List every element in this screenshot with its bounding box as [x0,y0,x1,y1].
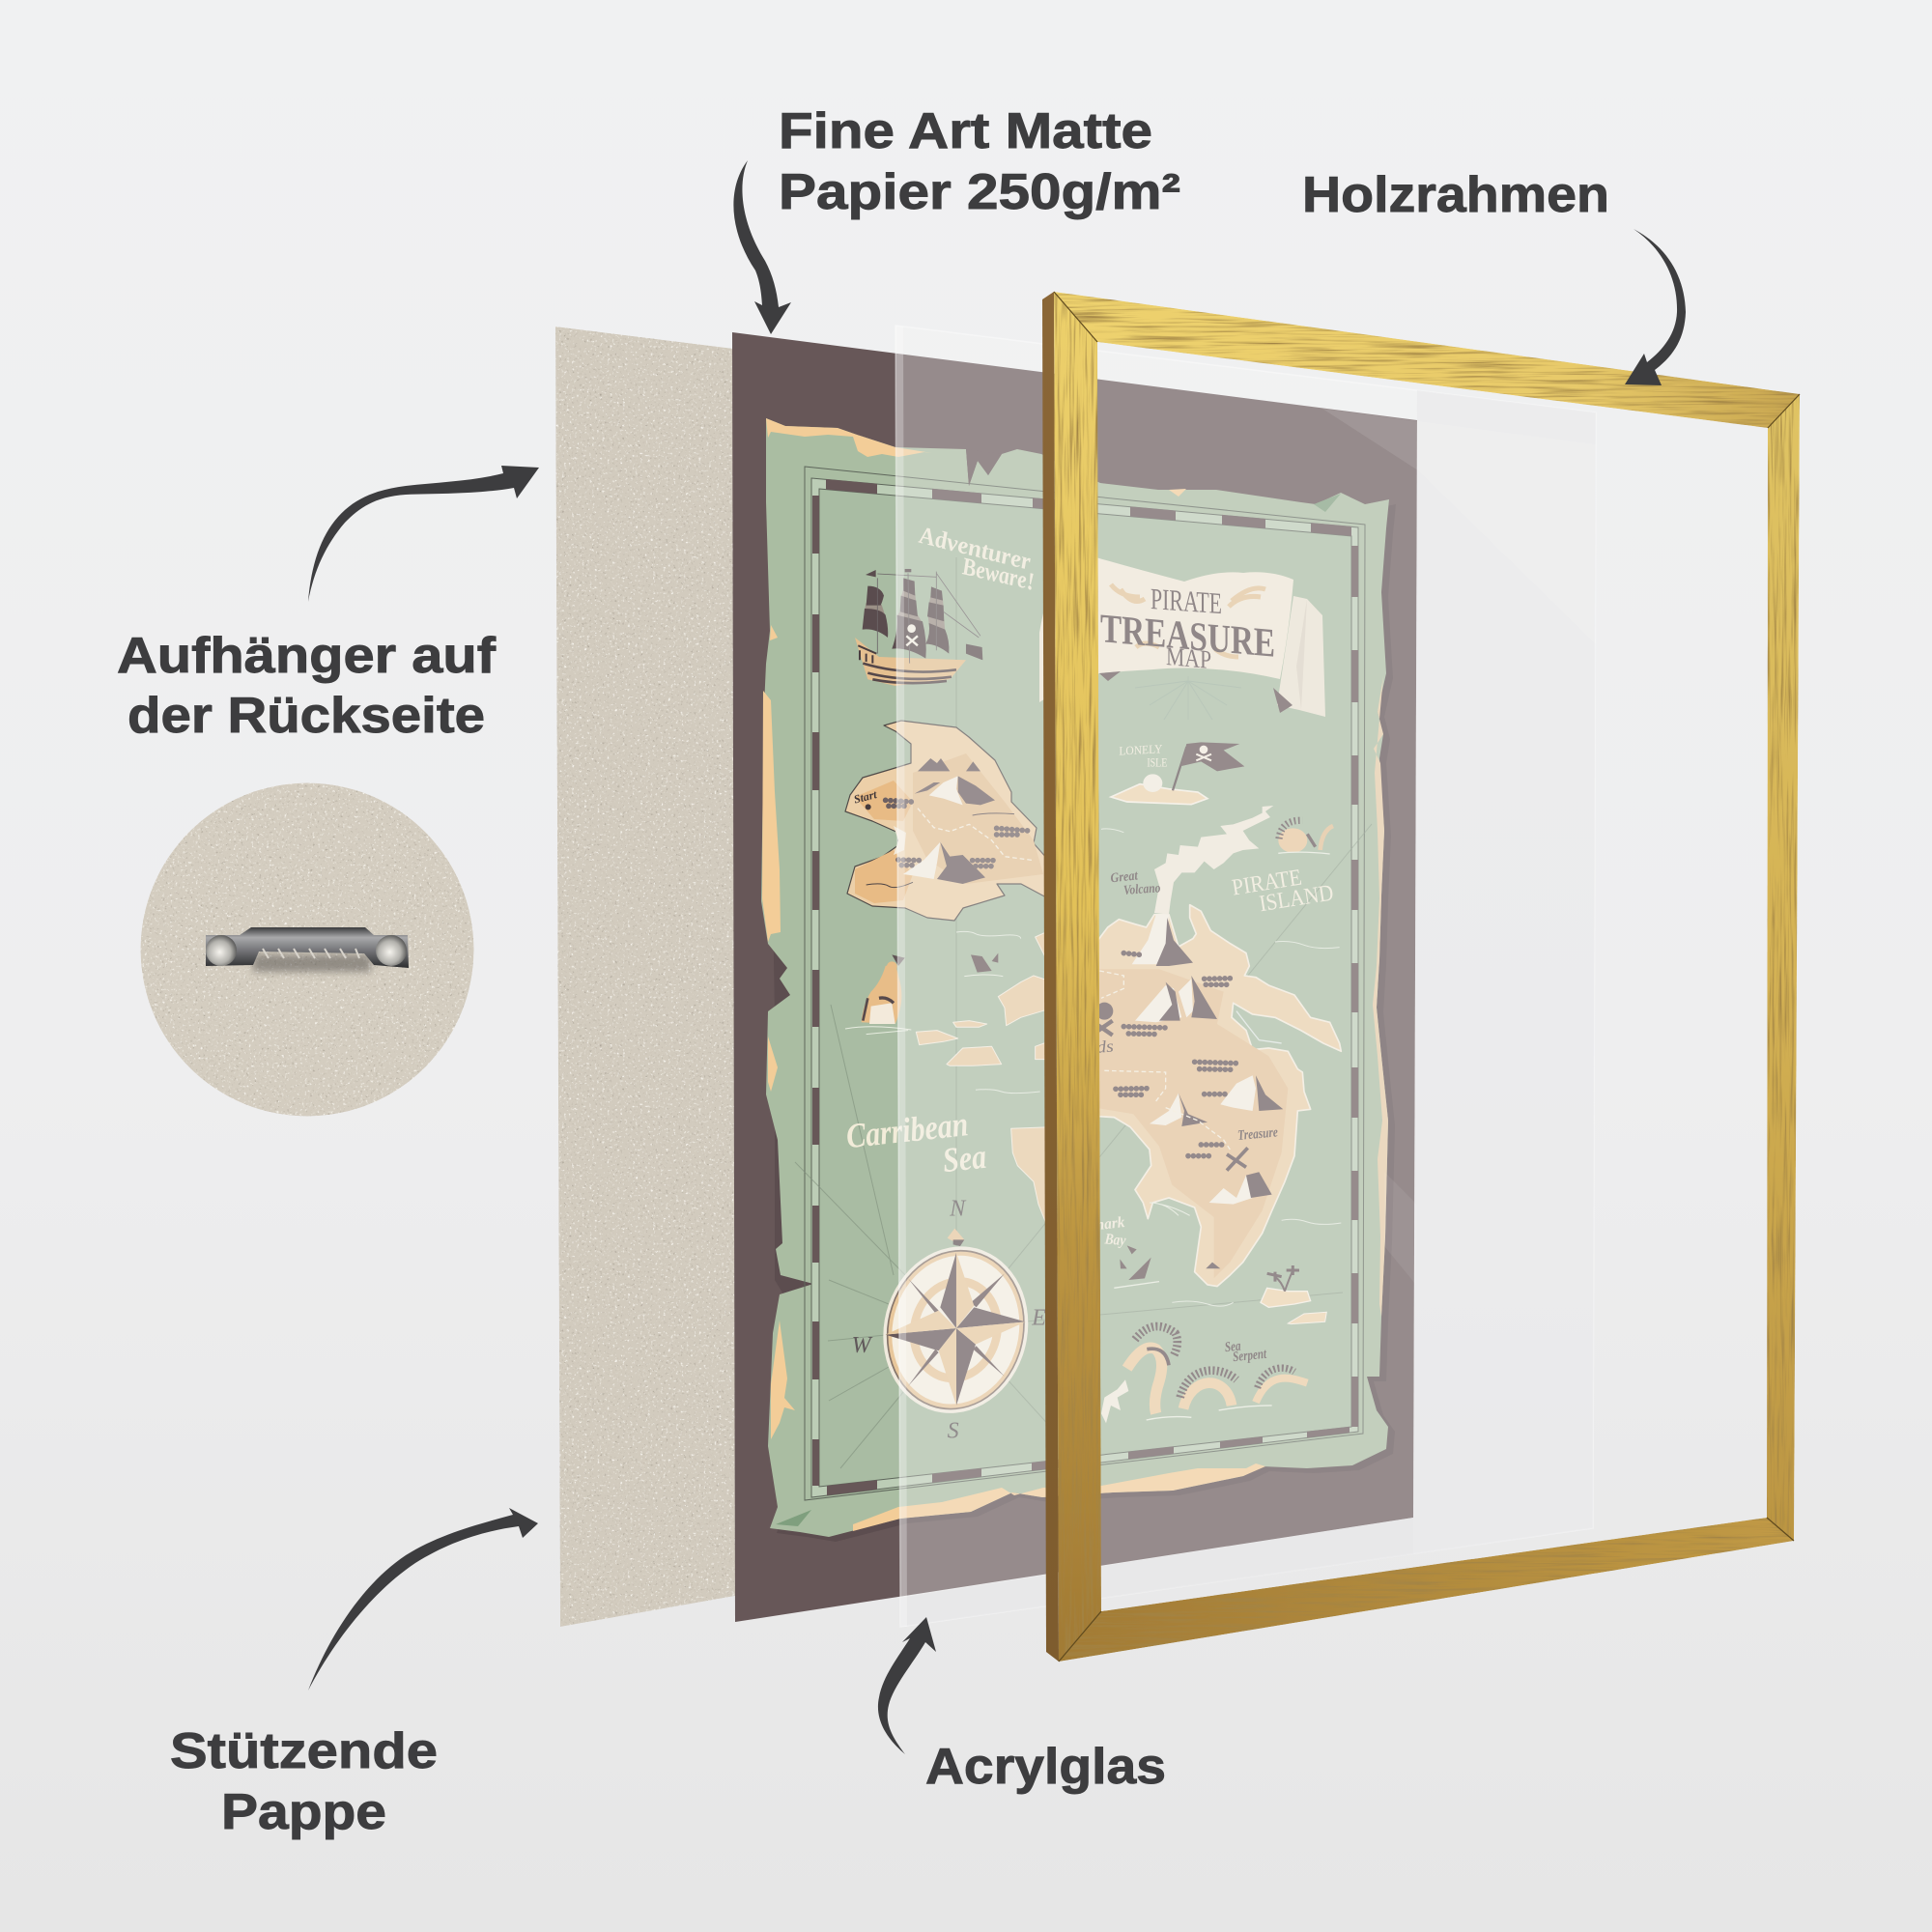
inset: sawtooth hanger on cardboard [141,782,473,1117]
hanger teeth [263,949,359,958]
label: Isle: ISLE [1147,755,1168,769]
palm island [1261,1265,1311,1307]
label: Bay: Bay [1103,1231,1127,1249]
compass letters: S [948,1418,959,1443]
arrow: Fine Art Papier [733,160,791,334]
map inner sea panel [819,489,1351,1487]
compass rose [852,1196,1046,1443]
border lines [805,467,1365,1500]
label: Acrylglas: Acrylglas [925,1739,1166,1795]
label: Great Volcano: Great [1110,868,1140,886]
rhumb lines [795,557,1372,1468]
left rivet [206,935,237,966]
compass letters [852,1196,1046,1443]
hull [855,638,966,686]
acrylic tint beyond mat [1413,390,1596,1554]
map water and small islands, bottle and fin [844,929,1053,1230]
label: Lonely Isle: LONELY [1119,742,1162,758]
arrow: Stützende Pappe [308,1508,538,1690]
island interior shading [1069,969,1288,1278]
frame side edge [1042,292,1059,1662]
label: Fine Art Matte Papier: Fine Art Matte [779,103,1152,159]
serpent fire [1101,1379,1128,1423]
right rivet [376,935,407,966]
panel: cardboard backing [555,327,735,1627]
shark bay fins [1120,1245,1151,1280]
sea serpent [1127,1326,1307,1420]
volcano smoke [1154,806,1273,915]
waves [956,931,1040,1094]
label: Papier 250g/m²: Papier 250g/m² [779,164,1180,220]
label: Holzrahmen: Holzrahmen [1302,167,1609,223]
volcano [1132,915,1193,966]
label: Start: Start [852,787,879,807]
parchment right pale edge [1373,676,1388,1317]
sails [863,569,982,660]
label: Treasure: Treasure [1237,1124,1279,1144]
arrow: Holzrahmen [1625,229,1686,385]
acrylic left edge highlight [895,326,907,1627]
title: Treasure: TREASURE [1100,607,1275,667]
label: Island: ISLAND [1258,880,1335,917]
small islands [916,929,1053,1230]
left island mountains [852,758,1034,888]
rigging [877,572,980,664]
arrow: Aufhänger [308,466,539,602]
upper reflection [1322,409,1596,644]
compass letters: W [852,1333,873,1358]
star points [886,1253,1026,1406]
frame right bar [1767,394,1800,1541]
hanger plate [206,927,409,968]
label: Aufhänger auf: Aufhänger auf [117,628,497,684]
treasure X [1227,1148,1248,1171]
banner ears [1099,671,1121,681]
label: Sea: Sea [1224,1339,1241,1355]
panel: fine art print [732,332,1417,1622]
acrylic sheet [895,326,1596,1627]
parchment tan torn edges [762,418,1265,1531]
parchment shadow [770,423,1396,1542]
trail [1099,971,1230,1150]
arrow: Acrylglas [878,1617,936,1754]
lonely isle [1111,742,1244,805]
shark fins [971,953,998,973]
panel: gold wood frame [1042,292,1800,1662]
dark green creases [776,494,1341,1526]
banner ornaments [1111,584,1265,657]
small sandbank [1288,1312,1326,1324]
label: Serpent: Serpent [1232,1347,1268,1365]
label: Carribean: Carribean [844,1104,970,1155]
lower reflection [1384,1172,1417,1285]
sea monster [1278,820,1333,854]
skull mark [1092,1003,1113,1036]
left island land [845,721,1048,921]
cardboard disc [141,782,473,1117]
north pointer [948,1229,964,1243]
label: Pappe: Pappe [221,1784,386,1840]
bay water highlights [1236,1011,1282,1043]
waves [1101,829,1340,949]
label: Shark Bay: Shark [1087,1214,1125,1235]
label: Stützende: Stützende [170,1723,438,1779]
label: Sea: Sea [941,1137,988,1179]
map border band [811,478,1358,1497]
panel: acrylic glass [895,326,1596,1627]
hanger shadow [253,954,371,972]
banner [1039,551,1325,720]
acrylic below mat tint [900,1518,1413,1627]
label: der Rückseite: der Rückseite [128,688,485,744]
frame top bar [1054,292,1800,428]
parchment map sheet [761,418,1389,1537]
mat background of the print [732,332,1417,1622]
frame left bar [1054,292,1101,1662]
waves [1172,1219,1341,1306]
title: Pirate: PIRATE [1151,582,1222,620]
label: Adventurer: Adventurer [918,520,1031,576]
island land [1063,905,1341,1287]
tree clumps [1116,953,1236,1156]
label: Volcano: Volcano [1123,881,1161,898]
mitre joints [1054,292,1800,1662]
ship [855,520,1035,686]
trail [918,809,1034,861]
left island shading [913,753,1043,884]
dial [883,1240,1028,1419]
checker band segments [812,479,1358,1495]
label: Beware: Beware! [961,552,1035,596]
terrain marks [867,882,913,888]
pirate island [1057,742,1341,1287]
mountains [1135,976,1283,1268]
left island [845,721,1048,921]
banner folds [1277,596,1325,717]
label: Islands: Islands [1057,1037,1115,1060]
banner body [1039,551,1293,702]
title: Map: MAP [1166,641,1211,674]
sunburst under banner [1135,676,1241,720]
start marker [866,804,871,810]
tree clumps [886,800,1029,867]
compass letters: N [949,1196,967,1221]
jolly roger [907,624,916,633]
sail bands [865,590,945,631]
message bottle [845,954,911,1035]
compass letters: E [1031,1306,1046,1331]
diagonal spikes [908,1273,1005,1386]
lower right map details [1087,1124,1341,1423]
label: Pirate Island: PIRATE [1231,866,1303,901]
torn notch at top edge [966,449,1002,486]
frame bottom bar [1059,1518,1794,1662]
